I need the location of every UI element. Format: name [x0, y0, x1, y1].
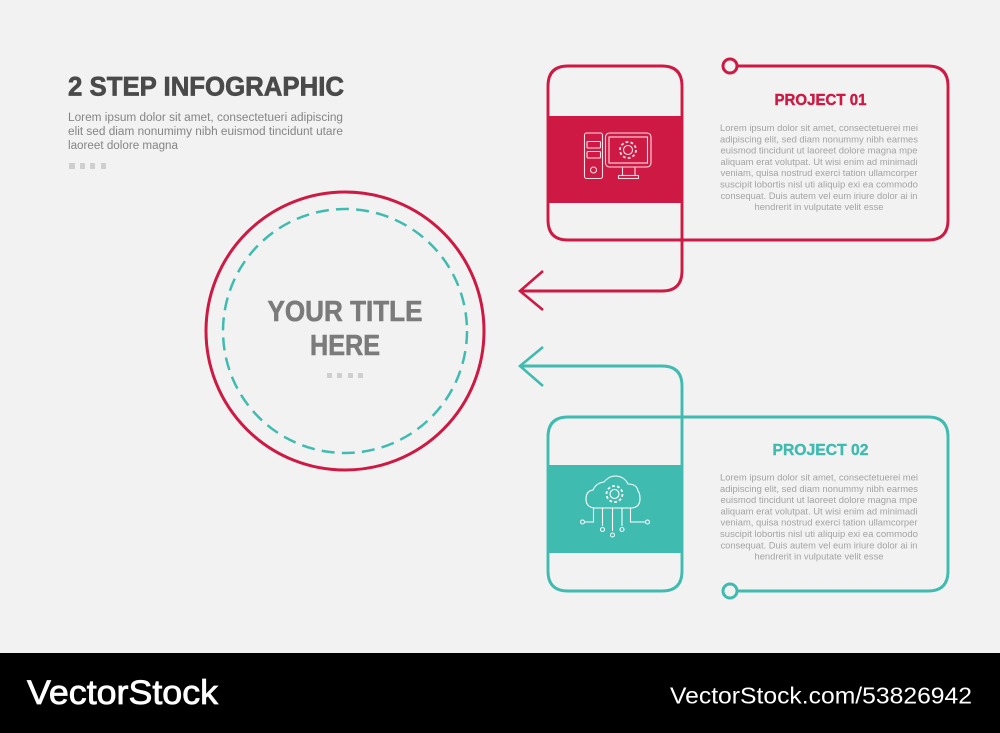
- connector outline and arrow: [520, 66, 948, 291]
- icon band: [548, 465, 682, 553]
- intro text: laoreet dolore magna: [68, 140, 179, 152]
- title block: [68, 72, 344, 169]
- project 02 body text: Lorem ipsum dolor sit amet, consectetuerei mei: [720, 472, 918, 482]
- project 01 heading: PROJECT 01: [774, 92, 867, 109]
- icon: cloud network: [580, 476, 650, 537]
- footer bar: [0, 653, 1000, 733]
- outer ring: [206, 192, 484, 470]
- connector node: [723, 584, 737, 598]
- project 02 body text: euismod tincidunt ut laoreet dolore magna mpe: [720, 495, 918, 505]
- project 01 body text: [720, 123, 918, 212]
- project 02 heading: PROJECT 02: [772, 442, 868, 459]
- circle dots: [327, 373, 363, 378]
- project 01 body text: aliquam erat volutpat. Ut wisi enim ad minimadi: [720, 157, 918, 167]
- project 02 body text: aliquam erat volutpat. Ut wisi enim ad minimadi: [720, 506, 918, 516]
- central circle: [206, 192, 484, 470]
- project 02 body text: hendrerit in vulputate velit esse: [754, 552, 884, 562]
- project 01 body text: hendrerit in vulputate velit esse: [754, 202, 884, 212]
- intro text: Lorem ipsum dolor sit amet, consectetueri adipiscing: [68, 112, 343, 124]
- project 02 body text: veniam, quisa nostrud exerci tation ullamcorper: [720, 518, 918, 528]
- footer logo text: VectorStock: [27, 674, 219, 712]
- project 02 body text: consequat. Duis autem vel eum iriure dolor ai in: [720, 540, 918, 550]
- connector outline and arrow: [520, 366, 948, 591]
- project 01 body text: adipiscing elit, sed diam nonummy nibh earmes: [720, 134, 918, 144]
- intro text: [68, 112, 343, 152]
- project 01 body text: euismod tincidunt ut laoreet dolore magna mpe: [720, 146, 918, 156]
- project 01 body text: suscipit lobortis nisl uti aliquip exi ea commodo: [720, 180, 918, 190]
- dashed inner ring: [223, 209, 467, 453]
- project 01 body text: Lorem ipsum dolor sit amet, consectetuerei mei: [720, 123, 918, 133]
- icon band: [548, 116, 682, 203]
- heading: 2 STEP INFOGRAPHIC: [68, 72, 344, 102]
- icon: desktop computer: [584, 133, 651, 178]
- arrow head: [520, 271, 543, 310]
- connector node: [723, 59, 737, 73]
- central circle: HERE: [310, 330, 380, 362]
- project 01 body text: veniam, quisa nostrud exerci tation ullamcorper: [720, 168, 918, 178]
- circle title: YOUR TITLE: [268, 296, 422, 328]
- title dots: [69, 163, 106, 169]
- project 02 body text: [720, 472, 918, 562]
- project 02 body text: adipiscing elit, sed diam nonummy nibh earmes: [720, 484, 918, 494]
- panel: project 02: [520, 347, 948, 598]
- intro text: elit sed diam nonumimy nibh euismod tincidunt utare: [68, 126, 343, 138]
- project 01 body text: consequat. Duis autem vel eum iriure dolor ai in: [720, 191, 918, 201]
- project 02 body text: suscipit lobortis nisl uti aliquip exi ea commodo: [720, 529, 918, 539]
- panel: project 01: [520, 59, 948, 310]
- arrow head: [520, 347, 543, 386]
- footer url: VectorStock.com/53826942: [670, 682, 972, 708]
